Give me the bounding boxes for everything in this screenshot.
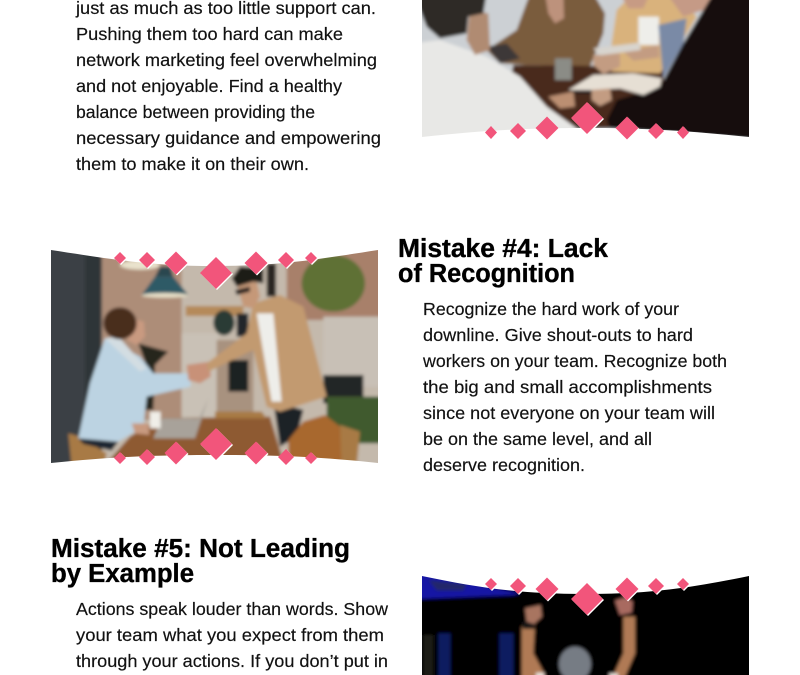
heading: mistake 4: [398, 235, 609, 288]
text block: mistake 5 body: Actions speak louder than words. Show: [76, 599, 388, 619]
heading: mistake 4: of Recognition: [398, 260, 575, 288]
text block: mistake 5 body: through your actions. If you don’t put in: [76, 651, 388, 671]
text block: mistake 4 body: [422, 299, 727, 475]
photo: team meeting around a table: [413, 0, 760, 140]
text block: mistake 3 closing paragraph: them to make it on their own.: [76, 154, 309, 174]
heading: mistake 4: Mistake #4: Lack: [398, 235, 609, 263]
text block: mistake 4 body: Recognize the hard work of your: [423, 299, 679, 319]
text block: mistake 5 body: your team what you expect from them: [76, 625, 384, 645]
heading: mistake 5: Mistake #5: Not Leading: [51, 535, 350, 563]
heading: mistake 5: by Example: [51, 560, 194, 588]
diamonds along photo top edge: [114, 252, 317, 289]
diamonds along photo top edge: [485, 578, 689, 615]
text block: mistake 3 closing paragraph: [75, 0, 381, 174]
text block: mistake 4 body: the big and small accomplishments: [423, 377, 712, 397]
photo: two men shaking hands over a table: [51, 250, 378, 465]
text block: mistake 4 body: since not everyone on your team will: [423, 403, 715, 423]
photo: speaker on stage with raised fists: [422, 576, 749, 675]
text block: mistake 3 closing paragraph: necessary guidance and empowering: [76, 128, 381, 148]
heading: mistake 5: [51, 535, 350, 588]
diamonds along photo bottom edge: [114, 428, 317, 465]
text block: mistake 4 body: downline. Give shout-outs to hard: [423, 325, 693, 345]
diamonds along photo bottom edge: [485, 102, 689, 140]
text block: mistake 4 body: deserve recognition.: [423, 455, 585, 475]
text block: mistake 3 closing paragraph: and not enjoyable. Find a healthy: [76, 76, 342, 96]
text block: mistake 3 closing paragraph: network marketing feel overwhelming: [76, 50, 377, 70]
text block: mistake 4 body: workers on your team. Recognize both: [422, 351, 727, 371]
text block: mistake 3 closing paragraph: Pushing them too hard can make: [76, 24, 343, 44]
text block: mistake 4 body: be on the same level, and all: [423, 429, 652, 449]
text block: mistake 5 body: [76, 599, 388, 671]
text block: mistake 3 closing paragraph: balance between providing the: [76, 102, 315, 122]
